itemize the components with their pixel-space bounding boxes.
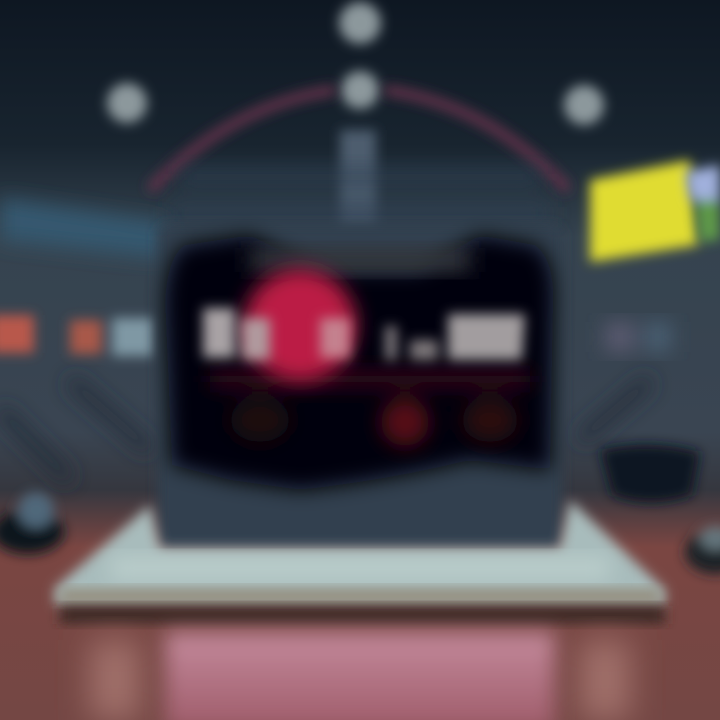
- left red and blue tags: [0, 315, 154, 356]
- left and right reflections: [90, 640, 630, 720]
- green and blue tags: [685, 165, 720, 242]
- arc: [150, 90, 568, 190]
- right faint tags: [605, 322, 671, 352]
- red circle: [244, 269, 356, 381]
- base shadow: [60, 606, 665, 624]
- vertical connector: [340, 130, 376, 225]
- left cup: [0, 492, 64, 554]
- far right cup: [685, 526, 720, 574]
- yellow note: [590, 160, 698, 262]
- lower screen reddish patterns: [210, 372, 530, 446]
- pink reflection: [165, 632, 555, 720]
- side diagonal streaks: [0, 380, 650, 480]
- floating nodes: [107, 2, 604, 125]
- base front edge: [60, 588, 660, 604]
- laptop base: [55, 500, 665, 605]
- laptop lid: [158, 225, 562, 550]
- top screen bar: [250, 248, 470, 272]
- right cup: [600, 444, 700, 502]
- left blue band: [0, 198, 165, 258]
- laptop screen black area: [165, 235, 553, 490]
- horizontal bands: [170, 170, 550, 221]
- blurred screen title: [203, 308, 525, 360]
- keyboard deck highlight: [110, 556, 610, 580]
